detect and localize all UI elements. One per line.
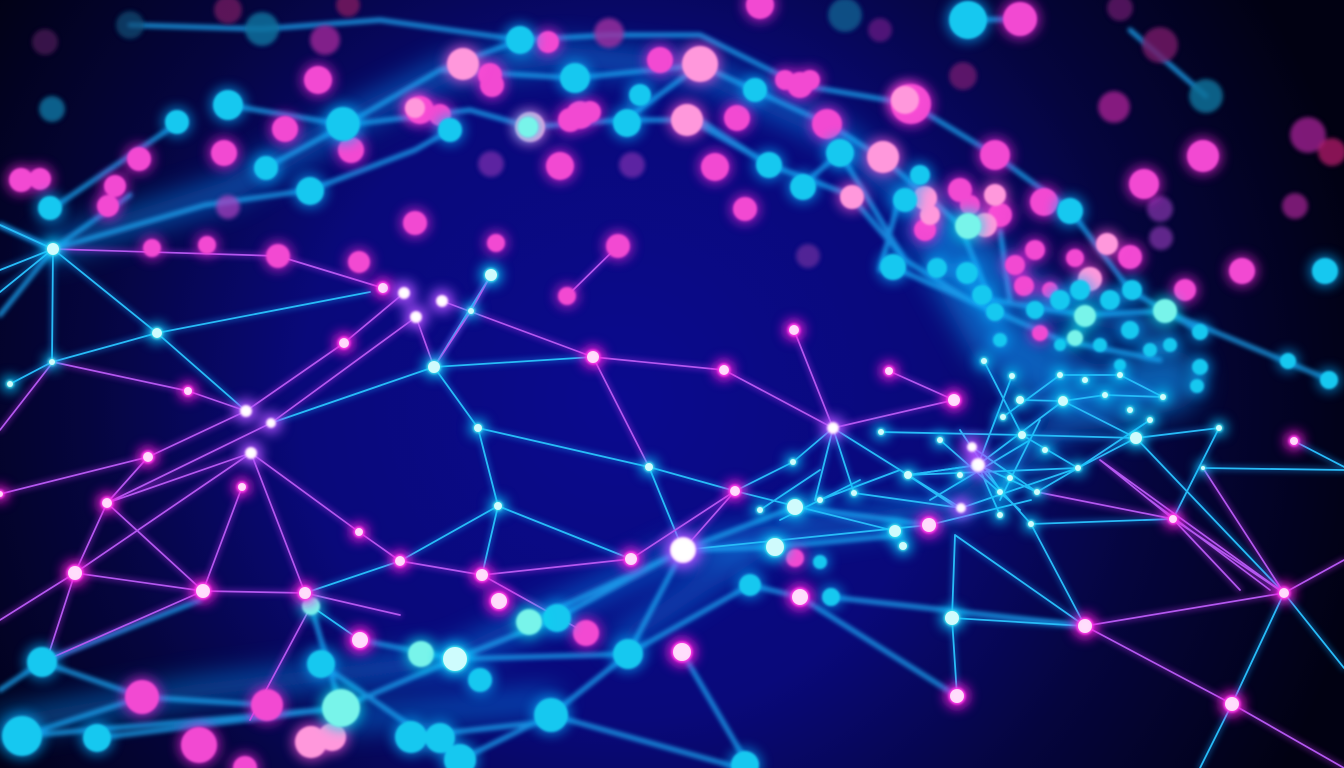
sharp cyan edges bbox=[0, 225, 1344, 768]
sharp violet edges bbox=[0, 246, 1344, 768]
out of focus nodes: pale pink bbox=[295, 46, 1118, 758]
sharp cyan nodes bbox=[7, 243, 1222, 671]
sharp white nodes bbox=[241, 288, 984, 562]
out of focus nodes: pale cyan bbox=[302, 117, 1177, 727]
faint distant nodes bbox=[32, 0, 1344, 268]
sharp magenta nodes bbox=[0, 283, 1298, 711]
